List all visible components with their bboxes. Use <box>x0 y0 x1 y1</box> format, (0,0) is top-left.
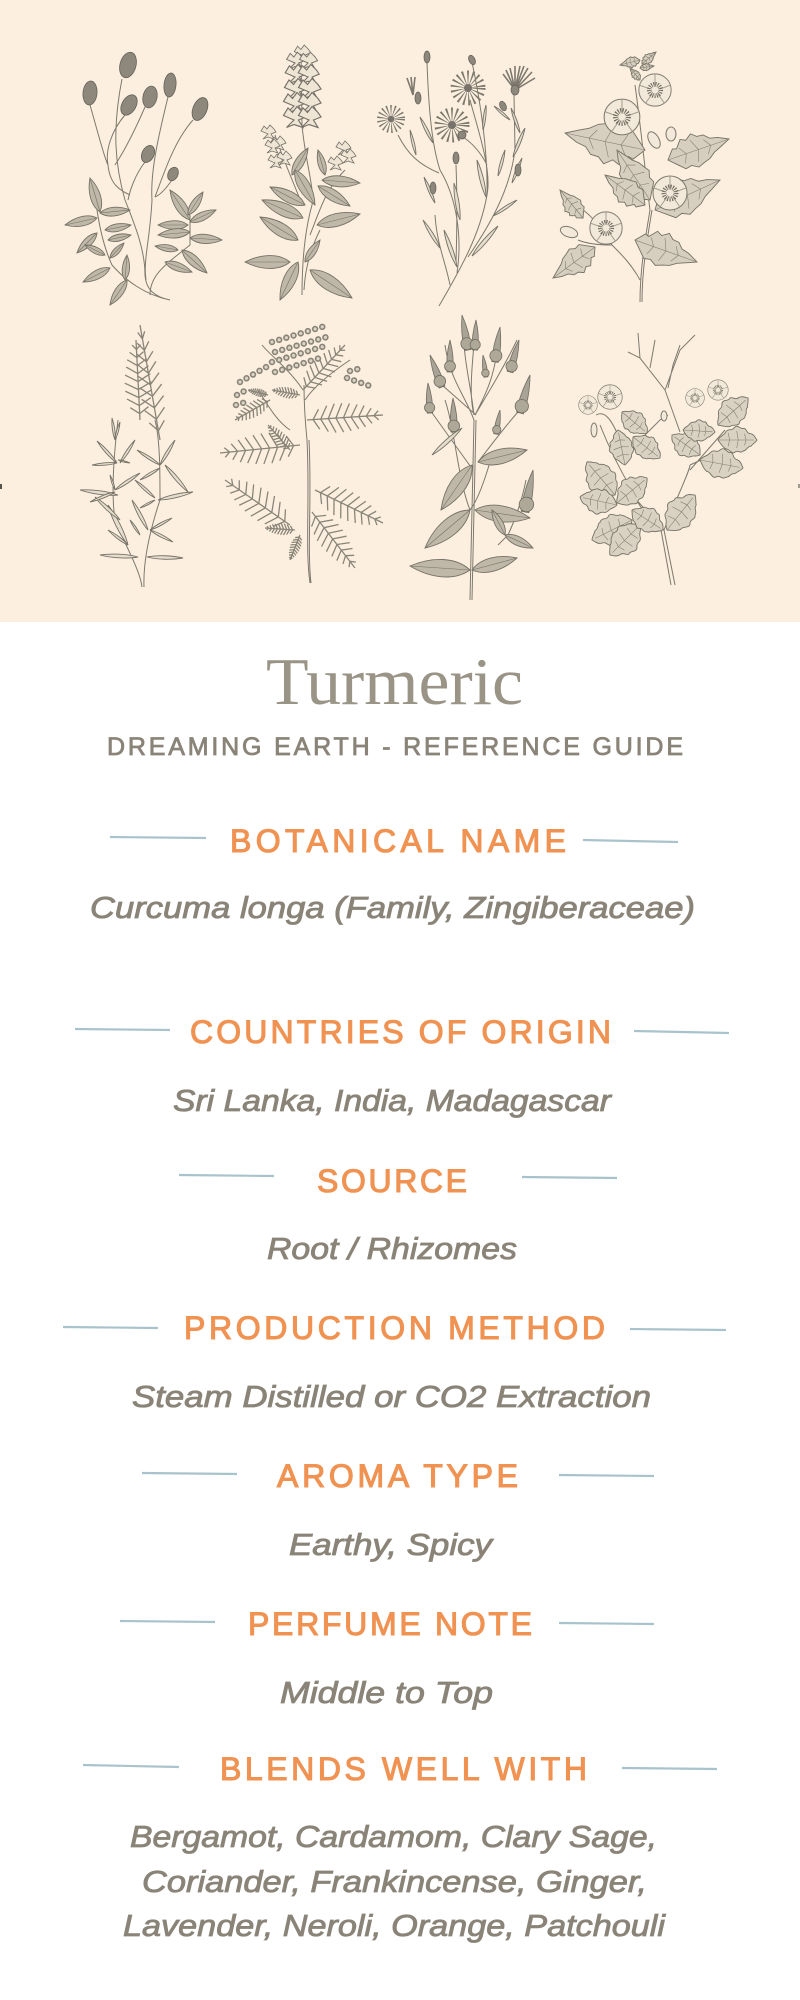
section: aroma type: AROMA TYPE <box>277 1458 518 1494</box>
section: aroma type <box>142 1458 654 1562</box>
section: countries of origin: Sri Lanka, India, Madagascar <box>173 1083 613 1118</box>
section: aroma type: Earthy, Spicy <box>289 1527 495 1562</box>
section: source <box>179 1163 617 1266</box>
section: source: Root / Rhizomes <box>267 1231 517 1266</box>
section: production method: Steam Distilled or CO2 Extraction <box>132 1379 651 1414</box>
section: production method: PRODUCTION METHOD <box>184 1310 605 1346</box>
section: countries of origin <box>75 1014 729 1118</box>
section: perfume note: PERFUME NOTE <box>248 1606 532 1642</box>
section: botanical name: Curcuma longa (Family, Zingiberaceae) <box>90 890 695 925</box>
icon: plant, thin-leaved flower spike <box>80 323 193 587</box>
icon: plant, cornflower with thistle heads <box>384 51 535 306</box>
section: source: SOURCE <box>317 1163 467 1199</box>
section: production method <box>63 1310 726 1414</box>
icon: plant, vervain with tall spikes <box>409 314 540 600</box>
section: blends well with <box>83 1751 717 1943</box>
icon: plant, burnet with oval seed heads <box>64 50 222 307</box>
section: perfume note <box>120 1606 654 1710</box>
section: blends well with: BLENDS WELL WITH <box>220 1751 587 1787</box>
icon: plant, celandine with lobed leaves <box>575 333 757 585</box>
title: Turmeric <box>266 645 523 719</box>
section: botanical name: BOTANICAL NAME <box>230 823 566 859</box>
subtitle: DREAMING EARTH - REFERENCE GUIDE <box>107 733 683 761</box>
section: countries of origin: COUNTRIES OF ORIGIN <box>190 1014 611 1050</box>
panel: botanical illustration banner <box>0 0 800 622</box>
section: botanical name <box>90 823 695 925</box>
icon: plant, tansy with feathery leaves and button flowers <box>216 326 389 583</box>
section: perfume note: Middle to Top <box>280 1675 493 1710</box>
section: blends well with: Coriander, Frankincense, Ginger, <box>142 1864 647 1899</box>
section: blends well with: Lavender, Neroli, Orange, Patchouli <box>123 1908 666 1943</box>
icon: plant, sage with flower spike <box>245 45 362 304</box>
icon: plant, mallow with serrated leaves and round flowers <box>545 48 734 302</box>
section: blends well with: Bergamot, Cardamom, Clary Sage, <box>130 1819 657 1854</box>
